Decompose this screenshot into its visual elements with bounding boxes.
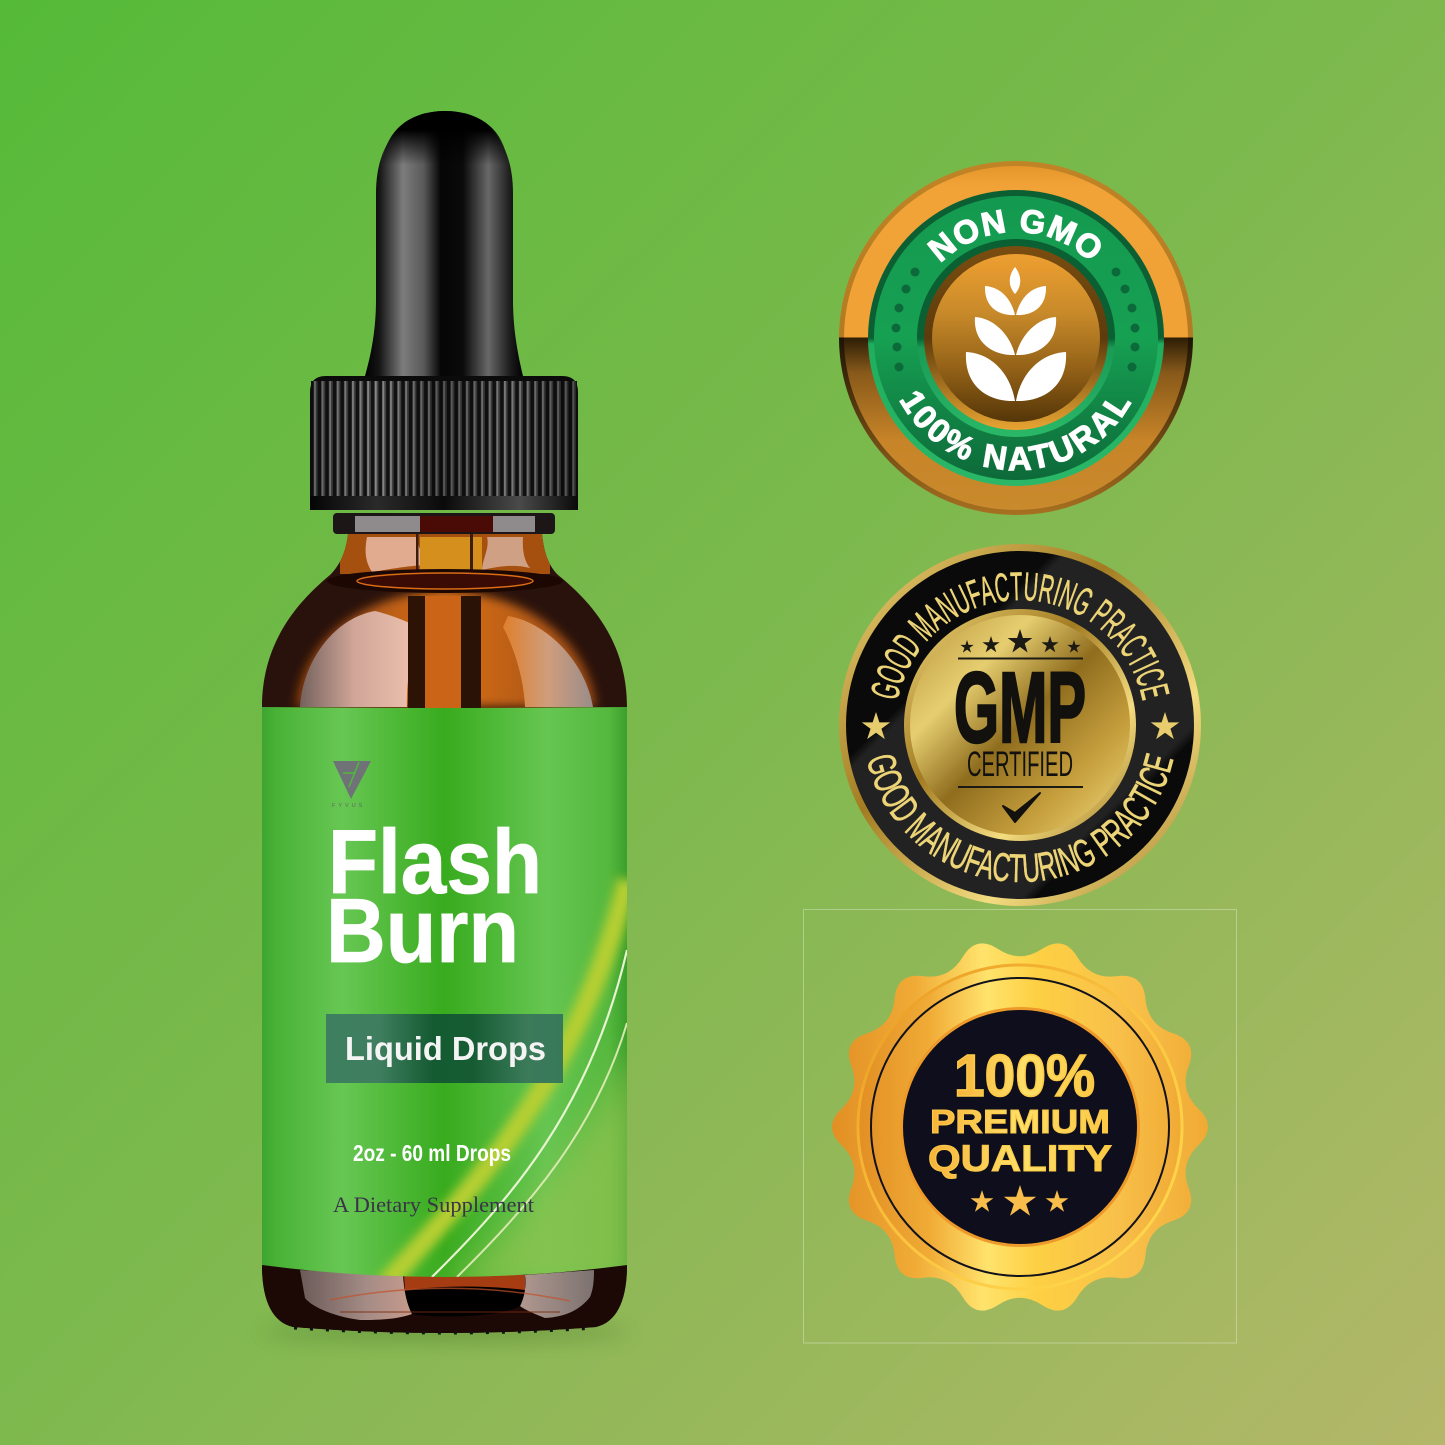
amber glass body xyxy=(262,534,627,1340)
ring dots xyxy=(892,268,1140,372)
product name: Burn xyxy=(326,881,519,982)
dietary supplement text: A Dietary Supplement xyxy=(333,1192,534,1217)
product bottle xyxy=(260,111,640,1341)
three stars xyxy=(971,1185,1068,1216)
bottle ground shadow xyxy=(260,1323,630,1341)
top five stars xyxy=(960,629,1081,653)
badge: gmp certified xyxy=(839,544,1201,906)
badge: 100% premium quality xyxy=(832,943,1208,1311)
scalloped seal xyxy=(832,943,1208,1311)
green product label xyxy=(262,707,640,1290)
liquid drops banner xyxy=(326,1014,563,1083)
badge: non gmo 100% natural xyxy=(839,161,1193,515)
liquid drops banner: Liquid Drops xyxy=(345,1030,546,1067)
volume text: 2oz - 60 ml Drops xyxy=(353,1140,511,1166)
100% natural curved text: 100% NATURAL xyxy=(899,390,1132,471)
good manufacturing practice curved text, bottom: GOOD MANUFACTURING PRACTICE xyxy=(868,752,1174,882)
icon: wheat plant xyxy=(966,267,1066,401)
dropper rubber bulb xyxy=(365,111,523,376)
product name xyxy=(326,812,542,982)
dark center disc xyxy=(903,1010,1137,1244)
non gmo curved text: NON GMO xyxy=(926,209,1101,262)
ribbed dropper cap xyxy=(310,376,578,510)
icon: check mark xyxy=(1003,793,1040,822)
gmp heading: GMP xyxy=(954,652,1086,764)
good manufacturing practice curved text, top: GOOD MANUFACTURING PRACTICE xyxy=(871,572,1170,701)
neck collar xyxy=(333,513,555,534)
product name: Flash xyxy=(328,812,542,913)
brand logo mark: FYVUS xyxy=(332,803,365,809)
quality text: QUALITY xyxy=(928,1138,1112,1179)
certified text: CERTIFIED xyxy=(967,745,1073,784)
side stars xyxy=(862,712,1179,739)
premium text: PREMIUM xyxy=(930,1103,1110,1140)
brand logo mark xyxy=(332,761,371,809)
badge frame outline xyxy=(804,910,1236,1343)
100% heading: 100% xyxy=(954,1043,1095,1109)
gold inner disc xyxy=(904,609,1136,841)
